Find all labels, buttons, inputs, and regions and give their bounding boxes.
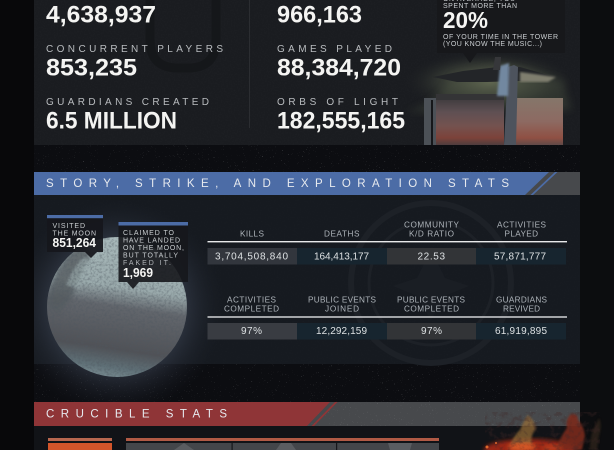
callout: time in the tower <box>437 0 565 63</box>
table: row one: K/D RATIO <box>409 230 454 239</box>
table: row two: ACTIVITIES <box>227 296 277 304</box>
callout: time in the tower: OF YOUR TIME IN THE TOWER <box>443 34 558 41</box>
table: row two: GUARDIANS <box>496 296 548 304</box>
stat: orbs of light: ORBS OF LIGHT <box>277 97 398 108</box>
stat: orbs of light <box>277 97 405 134</box>
callout: visited the moon: THE MOON <box>52 230 96 238</box>
table: row one: COMMUNITY <box>404 220 460 230</box>
stat: concurrent players: 853,235 <box>46 54 137 82</box>
callout: claimed to have landed <box>118 222 188 289</box>
table: row two: COMPLETED <box>224 304 279 314</box>
table: row two: 61,919,895 <box>495 326 547 337</box>
table: row one: 164,413,177 <box>314 252 369 262</box>
table: row two: PUBLIC EVENTS <box>308 296 377 304</box>
table: row one: DEATHS <box>324 230 360 239</box>
stat: orbs of light: 182,555,165 <box>277 108 405 134</box>
crucible icons <box>174 443 412 450</box>
stat: concurrent players: CONCURRENT PLAYERS <box>46 44 223 55</box>
crucible table header <box>126 438 439 450</box>
table: row one <box>208 220 567 264</box>
table: row two <box>208 296 567 340</box>
illustration: moon <box>34 219 205 400</box>
column divider <box>249 0 250 128</box>
stat: players: 4,638,937 <box>46 2 156 28</box>
banner: story, strike and exploration: STORY, STRIKE, AND EXPLORATION STATS <box>46 178 509 190</box>
illustration: the tower <box>402 50 578 145</box>
table: row one: KILLS <box>240 230 265 239</box>
table: row one: PLAYED <box>504 230 538 239</box>
stat: second column top: 966,163 <box>277 2 362 28</box>
table: row two: PUBLIC EVENTS <box>397 296 466 304</box>
stat: games played: GAMES PLAYED <box>277 44 392 55</box>
callout: claimed to have landed: HAVE LANDED <box>123 238 180 244</box>
table: row two: 97% <box>241 326 262 337</box>
banner: story, strike and exploration <box>34 172 580 195</box>
callout: claimed to have landed: CLAIMED TO <box>123 230 175 237</box>
callout: claimed to have landed: ON THE MOON, <box>123 245 184 252</box>
stat: guardians created <box>46 97 209 134</box>
table: row two: 12,292,159 <box>316 326 367 337</box>
table: row two: JOINED <box>325 304 359 314</box>
illustration: flames <box>484 412 601 450</box>
table: row two: 97% <box>421 326 442 337</box>
faint destiny emblem <box>150 0 216 68</box>
callout: visited the moon: 851,264 <box>52 236 96 250</box>
panel: overview stats <box>34 0 580 145</box>
callout: time in the tower: SPENT MORE THAN <box>443 3 517 10</box>
stat: guardians created: 6.5 MILLION <box>46 108 177 134</box>
stat: games played: 88,384,720 <box>277 54 401 82</box>
callout: time in the tower: 20% <box>443 7 488 33</box>
callout: visited the moon <box>47 215 103 258</box>
table: row two: COMPLETED <box>404 304 459 314</box>
panel: crucible top <box>34 426 580 450</box>
stat: guardians created: GUARDIANS CREATED <box>46 97 209 108</box>
callout: time in the tower: (YOU KNOW THE MUSIC...) <box>443 41 542 48</box>
faint faction emblem <box>351 203 511 363</box>
table: row one: 57,871,777 <box>494 252 546 262</box>
callout: claimed to have landed: 1,969 <box>123 266 153 280</box>
callout: visited the moon: VISITED <box>52 223 85 230</box>
table: row one: 22.53 <box>418 252 445 262</box>
banner: crucible stats <box>34 402 580 426</box>
callout: claimed to have landed: BUT TOTALLY <box>123 252 178 260</box>
callout: claimed to have landed: FAKED IT. <box>123 260 171 267</box>
table: row one: 3,704,508,840 <box>215 252 288 262</box>
panel: story, strike and exploration <box>34 195 580 364</box>
stat: games played <box>277 44 401 82</box>
crucible stat box <box>48 438 112 450</box>
table: row one: ACTIVITIES <box>497 220 547 230</box>
stat: concurrent players <box>46 44 223 82</box>
table: row two: REVIVED <box>503 304 540 314</box>
banner: crucible stats: CRUCIBLE STATS <box>46 409 227 421</box>
